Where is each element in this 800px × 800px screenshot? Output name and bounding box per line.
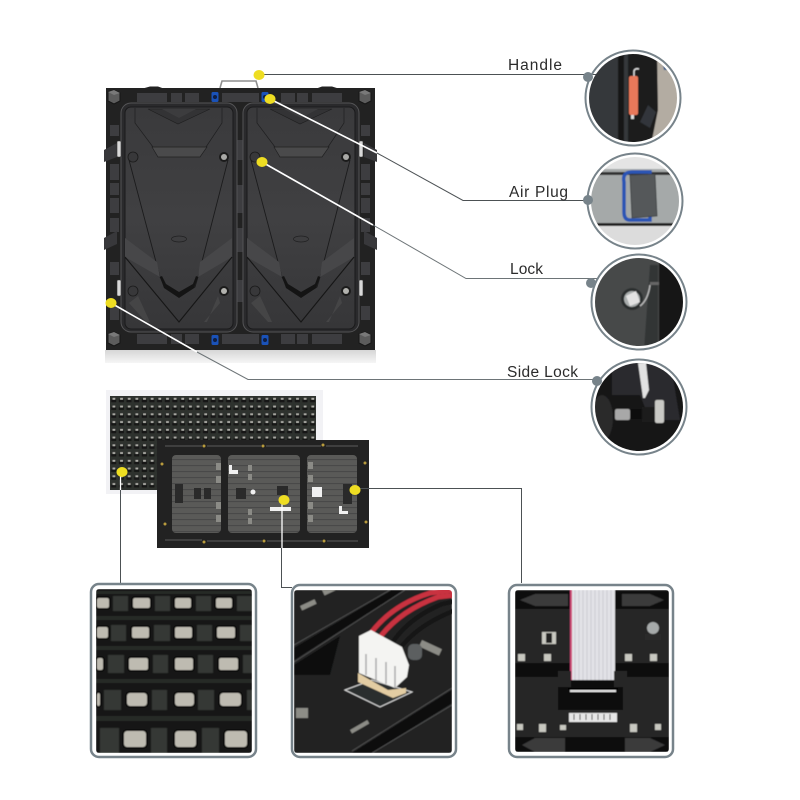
- LED module back: [157, 440, 369, 548]
- cream connector base: [358, 673, 406, 698]
- module windows: [172, 455, 357, 533]
- leader line: lock: [262, 162, 598, 278]
- board frame ribs: [515, 591, 669, 752]
- capacitor: [408, 644, 422, 660]
- LED module front: [106, 390, 323, 494]
- leader line: ribbon connector detail: [355, 488, 522, 583]
- surface components: [517, 632, 661, 732]
- cabinet frame: [104, 86, 377, 350]
- right door: [243, 103, 359, 332]
- detail panel: power connector close-up: [292, 582, 456, 757]
- callout marker dots: [106, 70, 360, 505]
- silkscreen terminal outline: [345, 680, 412, 707]
- cabinet floor reflection: [105, 350, 376, 363]
- red and black wires: [369, 590, 452, 647]
- connector header: [558, 671, 571, 687]
- detail panel: ribbon cable close-up: [509, 585, 673, 757]
- label: Air Plug: Air Plug: [509, 184, 568, 201]
- LED lamps: [96, 597, 248, 748]
- leader line: side lock: [111, 303, 598, 380]
- module components: [160, 444, 368, 544]
- leader line: LED detail: [120, 472, 122, 583]
- board frame ribs: [294, 590, 452, 753]
- air plugs: [212, 92, 268, 345]
- leader line: air plug: [270, 99, 598, 200]
- corner brackets: [108, 90, 371, 346]
- left door: [121, 103, 237, 332]
- LED cabinet rear view: [104, 81, 377, 363]
- pin header footprint: [569, 713, 617, 722]
- carrying handle: [220, 81, 258, 88]
- leader line: power connector detail: [282, 500, 292, 588]
- detail circle: lock: [586, 254, 689, 350]
- white connector housing: [359, 630, 409, 688]
- detail panel: LED pixels close-up: [91, 584, 256, 757]
- leader line: handle: [259, 74, 598, 76]
- side locks: [117, 141, 363, 296]
- horizontal ribs: [96, 591, 252, 721]
- label: Handle: Handle: [508, 57, 562, 74]
- detail circle: side lock: [591, 360, 686, 454]
- LED mounting fins: [100, 596, 252, 753]
- detail circle: air plug: [583, 154, 682, 248]
- detail circle: handle: [583, 50, 682, 146]
- label: Lock: Lock: [510, 261, 543, 278]
- ribbon cable: [571, 590, 615, 680]
- label: Side Lock: Side Lock: [507, 364, 578, 381]
